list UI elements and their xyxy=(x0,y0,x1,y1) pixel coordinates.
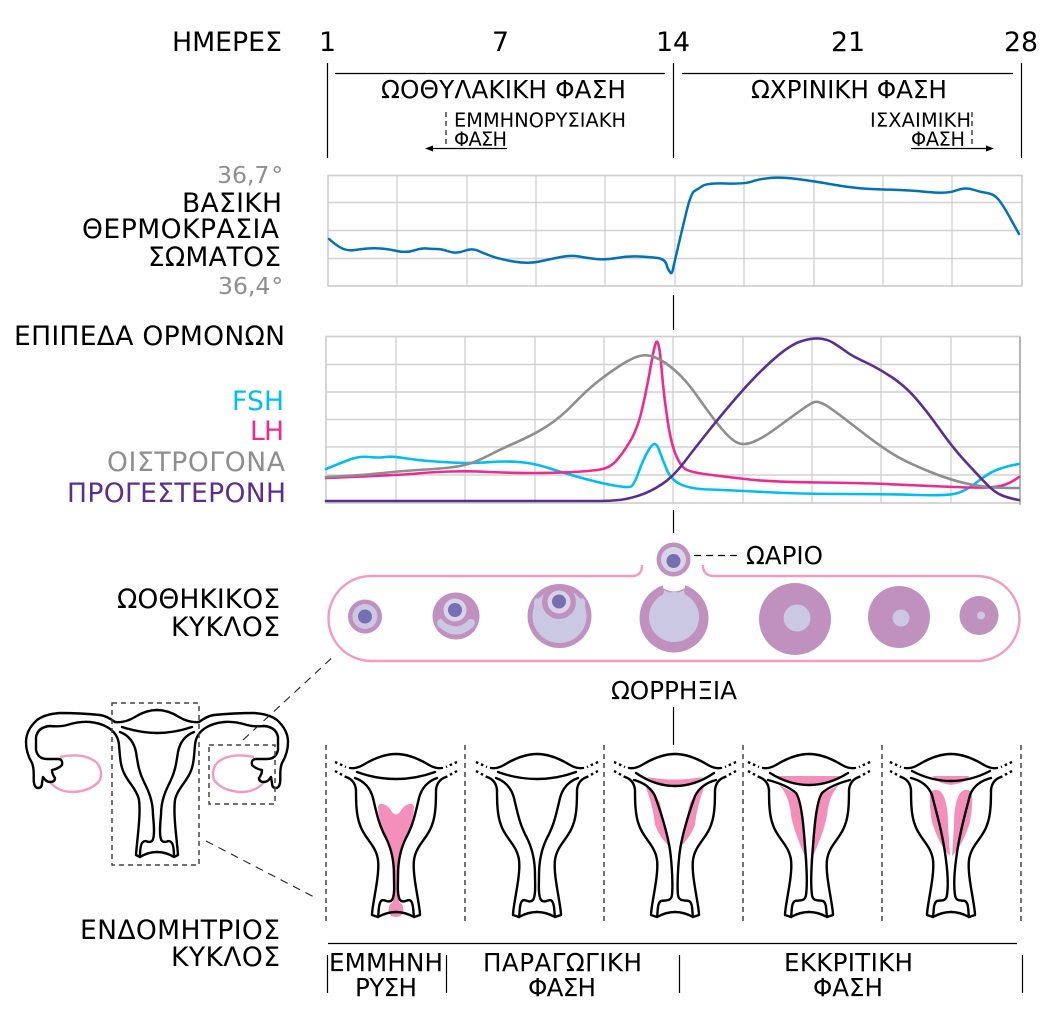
uterus stage 4: mid secretory xyxy=(748,754,870,917)
label: proliferative phase: ΠΑΡΑΓΩΓΙΚΗ xyxy=(483,948,642,977)
label: menstruation: ΡΥΣΗ xyxy=(355,973,417,1002)
day numbers: 7 xyxy=(492,27,509,58)
heading: hormone levels: ΕΠΙΠΕΔΑ ΟΡΜΟΝΩΝ xyxy=(14,321,285,352)
uterus stage 3: early secretory xyxy=(614,754,736,917)
temperature labels: ΒΑΣΙΚΗ xyxy=(182,188,282,219)
heading: ovarian cycle: ΚΥΚΛΟΣ xyxy=(171,612,280,643)
dashed box: ovary xyxy=(209,745,275,804)
curve: FSH xyxy=(326,444,1019,495)
day numbers: 21 xyxy=(831,27,865,58)
timeline vertical markers xyxy=(328,63,1022,158)
label: proliferative phase: ΦΑΣΗ xyxy=(528,973,596,1002)
heading: endometrial cycle xyxy=(80,915,280,973)
menstrual phase note with arrow xyxy=(425,109,626,152)
tick between charts xyxy=(672,295,674,330)
label: menstruation: ΕΜΜΗΝΗ xyxy=(329,948,443,977)
label: proliferative phase xyxy=(483,948,642,1002)
ovary outline xyxy=(328,565,1020,661)
label: secretory phase: ΕΚΚΡΙΤΙΚΗ xyxy=(784,948,913,977)
curve: LH xyxy=(326,342,1019,488)
luteal phase header: ΩΧΡΙΝΙΚΗ ΦΑΣΗ xyxy=(751,75,947,104)
day numbers: 1 xyxy=(319,27,336,58)
released ovum xyxy=(656,542,690,576)
follicle 1 xyxy=(348,600,382,634)
corpus luteum 1 xyxy=(759,583,831,655)
hormone legend: ΟΙΣΤΡΟΓΟΝΑ xyxy=(107,447,285,478)
dashed box: uterus xyxy=(112,703,199,865)
chart: basal body temperature xyxy=(328,175,1022,286)
heading: endometrial cycle: ΕΝΔΟΜΗΤΡΙΟΣ xyxy=(80,915,280,946)
menstrual phase note with arrow: ΦΑΣΗ xyxy=(454,128,507,151)
corpus luteum 3 xyxy=(960,596,998,635)
hormone legend xyxy=(67,386,286,509)
label: secretory phase xyxy=(784,948,913,1002)
hormone legend: LH xyxy=(250,416,284,447)
corpus luteum 2 xyxy=(868,586,930,648)
menstrual phase note with arrow: ΕΜΜΗΝΟΡΥΣΙΑΚΗ xyxy=(454,109,626,132)
temperature labels xyxy=(82,161,283,300)
curve: progesterone xyxy=(326,338,1019,501)
ischemic phase note with arrow: ΙΣΧΑΙΜΙΚΗ xyxy=(870,109,971,132)
heading: ovarian cycle: ΩΟΘΗΚΙΚΟΣ xyxy=(117,584,280,615)
phase separators xyxy=(326,745,1021,925)
temperature labels: 36,7° xyxy=(217,161,283,189)
label: menstruation xyxy=(329,948,443,1002)
tick below hormone chart xyxy=(672,510,674,533)
ovum label: ΩΑΡΙΟ xyxy=(746,541,823,570)
heading: ovarian cycle xyxy=(117,584,280,643)
ischemic phase note with arrow: ΦΑΣΗ xyxy=(911,128,965,151)
heading: endometrial cycle: ΚΥΚΛΟΣ xyxy=(171,942,280,973)
temperature labels: ΘΕΡΜΟΚΡΑΣΙΑ xyxy=(82,214,279,245)
dashed leader to uterus row xyxy=(206,841,316,898)
icon: whole uterus and ovaries xyxy=(26,710,288,857)
endometrial phase bar xyxy=(328,944,1022,993)
uterus stage 5: late secretory xyxy=(890,754,1012,917)
temperature labels: ΣΩΜΑΤΟΣ xyxy=(148,242,281,273)
temperature labels: 36,4° xyxy=(218,272,283,300)
ovulation label xyxy=(611,676,737,745)
follicular phase header: ΩΟΘΥΛΑΚΙΚΗ ΦΑΣΗ xyxy=(381,75,626,104)
ovulation label: ΩΟΡΡΗΞΙΑ xyxy=(611,676,737,705)
follicle 2 xyxy=(432,592,480,640)
label: secretory phase: ΦΑΣΗ xyxy=(813,973,883,1002)
day numbers: 28 xyxy=(1004,27,1038,58)
hormone legend: ΠΡΟΓΕΣΤΕΡΟΝΗ xyxy=(67,478,286,509)
day numbers xyxy=(319,27,1038,58)
follicle 3 xyxy=(528,584,592,648)
ovum label xyxy=(694,541,823,570)
heading: days label: ΗΜΕΡΕΣ xyxy=(172,27,282,58)
ischemic phase note with arrow xyxy=(870,109,994,152)
hormone legend: FSH xyxy=(232,386,284,417)
follicle 4: rupture xyxy=(640,580,708,652)
day numbers: 14 xyxy=(656,27,690,58)
chart: hormone levels xyxy=(326,336,1020,505)
curve: estrogen xyxy=(326,355,1019,488)
uterus stage 1: menstruation xyxy=(335,754,457,917)
dashed leader to ovary row xyxy=(243,655,335,740)
uterus stage 2: proliferative xyxy=(476,754,598,917)
